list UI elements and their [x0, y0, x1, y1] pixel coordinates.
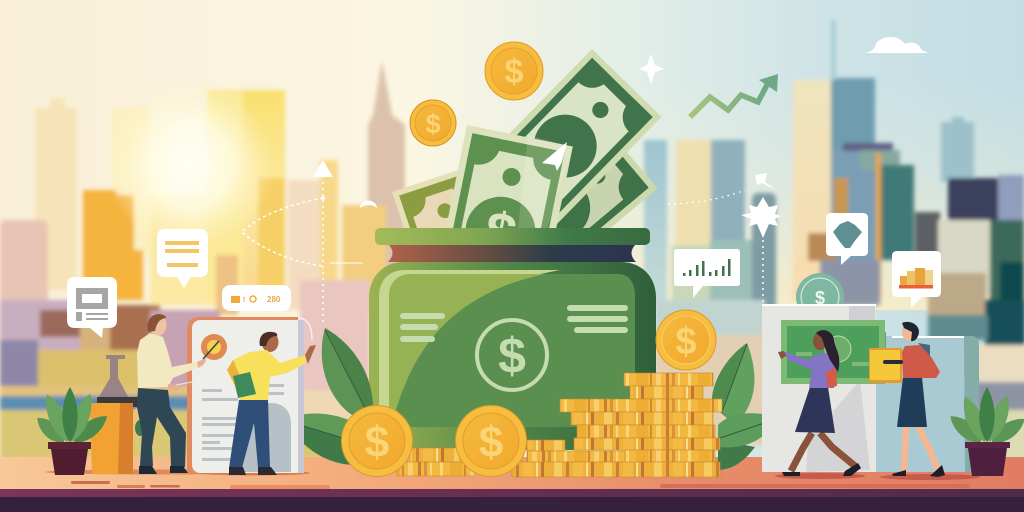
person: man in cream sweater: [137, 314, 207, 474]
paper plane: [542, 142, 567, 171]
dotted analytics path: [242, 160, 363, 322]
banknote front: [422, 117, 581, 333]
dollar emblem: [477, 320, 547, 390]
label fill: [389, 274, 635, 427]
bubble: line chart: [674, 249, 740, 298]
large leaves right: [712, 343, 780, 470]
blue panel right: [876, 336, 979, 472]
floating coin small: $: [425, 109, 441, 139]
jar neck: [388, 244, 636, 262]
floor base: [0, 497, 1024, 512]
banknote large right: [469, 40, 670, 243]
speech bubble: report: [67, 277, 117, 338]
coin stack right: [560, 373, 722, 477]
large leaves left: [285, 328, 375, 465]
floating coin top: $: [505, 53, 524, 91]
orange box and machine: [90, 355, 145, 474]
banknote on panel: [781, 320, 886, 384]
coin stack center: [512, 440, 640, 477]
bubble: bar chart: [892, 251, 941, 308]
growth arrow: [690, 74, 778, 117]
document panel: [187, 317, 312, 473]
potted plant right: [945, 387, 1024, 476]
document text lines: [202, 384, 284, 461]
white panel right: [762, 304, 876, 472]
banknote left: [385, 157, 530, 341]
sparkle star: [639, 54, 664, 85]
coin on stack: [656, 310, 716, 370]
jar body: [369, 262, 656, 450]
big coin center: [456, 406, 526, 476]
yellow folder: [869, 348, 902, 383]
person: woman with purple top: [778, 330, 861, 476]
ground: [0, 457, 1024, 490]
floor edge: [0, 489, 1024, 497]
banknote front: $: [479, 198, 522, 266]
floating coin small: [410, 100, 456, 146]
label pill: 280: [267, 295, 281, 304]
label lines left: [400, 313, 445, 342]
label lines right: [567, 305, 628, 333]
small dome: [360, 200, 377, 208]
label pill: [222, 285, 291, 311]
big coin left: [342, 406, 412, 476]
label pill: t: [243, 295, 246, 304]
teal coin behind panel: [796, 273, 844, 321]
coin stack left: [397, 448, 475, 476]
warm horizon haze: [560, 80, 1024, 310]
person: man in yellow sweater: [227, 332, 316, 475]
jar label panel: [379, 270, 560, 427]
jar lid: [375, 228, 650, 245]
banknote sheen: [518, 135, 573, 229]
floating coin top: [485, 42, 543, 100]
bubble: cloud icon: [826, 213, 868, 265]
label highlight: [389, 274, 545, 410]
teal coin behind panel: $: [815, 288, 825, 308]
dotted link and star: [668, 173, 781, 302]
dollar emblem: $: [498, 328, 526, 384]
coin on stack: $: [675, 321, 697, 363]
orange target badge: [201, 334, 227, 360]
big coin center: $: [479, 418, 503, 467]
sun glow: [105, 80, 275, 250]
money jar: [369, 228, 656, 450]
banknote back right: [461, 105, 666, 303]
speech bubble: text lines: [157, 229, 208, 288]
big coin left: $: [365, 418, 389, 467]
person: woman with red top: [869, 322, 945, 477]
potted plant left: [32, 387, 112, 475]
cloud: [865, 37, 928, 53]
green book: [233, 372, 256, 398]
